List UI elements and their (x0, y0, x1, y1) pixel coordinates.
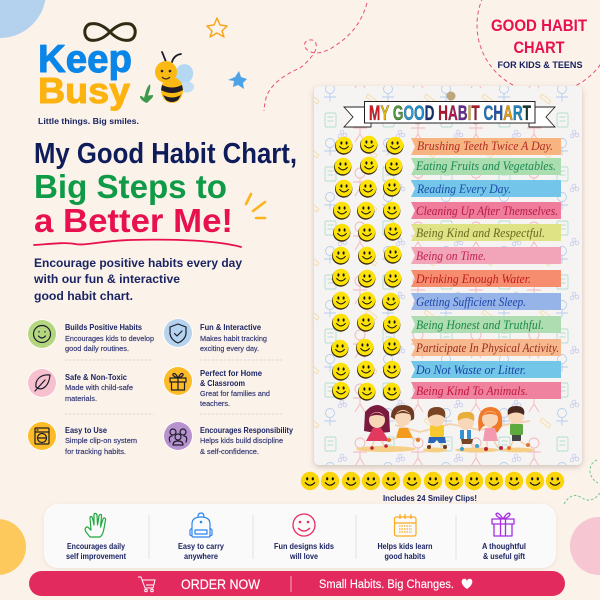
habit 6: Being on Time. (416, 249, 486, 263)
heading line 2: Big Steps to (34, 168, 227, 205)
order bar (29, 571, 565, 596)
dashed circle decoration (477, 0, 600, 93)
habit 2 (334, 157, 561, 176)
benefit: useful gift: A thoughtful (482, 542, 526, 551)
badge: good habit chart: FOR KIDS & TEENS (498, 60, 582, 70)
panel: features (27, 318, 293, 456)
feature: fun and interactive: Fun & Interactive (200, 323, 262, 332)
child 2 (387, 405, 420, 442)
pink corner circle (570, 517, 600, 575)
icon: bee (155, 52, 196, 103)
feature: easy to use: for tracking habits. (65, 447, 126, 456)
feature: fun and interactive: exciting every day. (200, 344, 259, 353)
child 6 (507, 406, 530, 450)
child 1 (364, 405, 390, 450)
habit 1: Brushing Teeth Twice A Day. (417, 139, 553, 153)
description text: good habit chart. (34, 289, 133, 303)
benefit: easy to carry: anywhere (184, 552, 219, 561)
benefit: fun designs: will love (289, 552, 319, 561)
habit 5: Being Kind and Respectful. (416, 226, 545, 240)
feature: builds positive habits (27, 319, 154, 353)
child 3 (427, 407, 447, 449)
habit 2: Eating Fruits and Vegetables. (415, 159, 556, 173)
habit 6 (332, 246, 561, 265)
panel: habit chart board (314, 86, 582, 465)
habit 11 (332, 361, 561, 381)
badge: good habit chart: CHART (514, 39, 564, 57)
benefit: self improvement: self improvement (66, 552, 126, 561)
logo word Keep: Keep (38, 38, 132, 81)
benefit: easy to carry (178, 513, 225, 561)
feature: safe and non-toxic: Made with child-safe (65, 383, 133, 392)
heading line 3: a Better Me! (34, 202, 233, 239)
feature: builds positive habits: Encourages kids to develop (65, 334, 154, 343)
feature: builds positive habits: Builds Positive Habits (65, 323, 142, 332)
feature: easy to use (27, 421, 137, 456)
description text: with our fun & interactive (33, 272, 180, 286)
order now label: ORDER NOW (181, 577, 260, 592)
benefit: easy to carry: Easy to carry (178, 542, 225, 551)
heading (34, 138, 297, 247)
row of loose smiley clips (301, 472, 564, 490)
habit 12: Being Kind To Animals. (416, 384, 528, 398)
habit 7: Drinking Enough Water. (415, 272, 531, 286)
habit 7 (332, 269, 561, 288)
benefit: helps learn habits (378, 514, 433, 561)
feature: safe and non-toxic: materials. (65, 394, 97, 403)
habit rows (331, 136, 561, 401)
yellow corner circle (0, 519, 26, 575)
habit 10: Participate In Physical Activity. (415, 341, 559, 355)
smiley clips caption: Includes 24 Smiley Clips! (383, 494, 477, 503)
child 4 (458, 412, 479, 451)
icon: cart (138, 577, 155, 592)
feature: fun and interactive (163, 318, 267, 353)
habit 10 (331, 338, 561, 358)
benefit: helps learn habits: good habits (384, 552, 426, 561)
feature: encourages responsibility (163, 421, 293, 456)
icon: outline star (207, 18, 227, 37)
feature: builds positive habits: good daily routines. (65, 344, 129, 353)
habit 9 (332, 314, 561, 334)
habit 4 (333, 202, 561, 220)
blue corner circle (0, 0, 46, 38)
feature: perfect for home and classroom (163, 366, 270, 408)
feature: perfect for home and classroom: Perfect for Home (200, 369, 263, 378)
habit 3: Reading Every Day. (416, 182, 511, 196)
feature: safe and non-toxic: Safe & Non-Toxic (65, 373, 128, 382)
benefit: helps learn habits: Helps kids learn (378, 542, 433, 551)
habit 3 (335, 179, 561, 198)
green dashed decoration (564, 460, 600, 504)
feature: perfect for home and classroom: Great for families and (200, 389, 270, 398)
dashed swirl decoration (264, 3, 367, 111)
child 5 (478, 407, 503, 451)
logo: Keep Busy (38, 24, 196, 126)
benefit: self improvement (66, 514, 126, 561)
chart banner: MY GOOD HABIT CHART (369, 102, 531, 125)
benefit: fun designs (274, 514, 335, 561)
feature: encourages responsibility: Encourages Responsibility (200, 426, 293, 435)
feature: perfect for home and classroom: teachers. (200, 399, 230, 408)
feature: easy to use: Simple clip-on system (65, 436, 137, 445)
badge: good habit chart: GOOD HABIT (491, 17, 587, 35)
pin (446, 92, 456, 100)
feature: fun and interactive: Makes habit tracking (200, 334, 267, 343)
panel: benefits strip (44, 504, 556, 568)
benefit: useful gift (482, 513, 526, 561)
logo word Busy: Busy (38, 70, 130, 111)
habit 11: Do Not Waste or Litter. (415, 363, 526, 377)
habit 8 (332, 292, 561, 311)
illustration: children holding hands (356, 405, 534, 452)
icon: infinity (85, 24, 135, 40)
habit 8: Getting Sufficient Sleep. (416, 295, 526, 309)
benefit: useful gift: & useful gift (483, 552, 525, 561)
badge: good habit chart (491, 17, 587, 70)
habit 9: Being Honest and Truthful. (416, 318, 544, 332)
icon: heart (462, 579, 472, 589)
feature: perfect for home and classroom: & Classroom (200, 379, 245, 388)
sparks (246, 194, 265, 218)
heading line 1: My Good Habit Chart, (34, 138, 297, 170)
benefit: fun designs: Fun designs kids (274, 542, 335, 551)
feature: encourages responsibility: & self-confidence. (200, 447, 259, 456)
underline (34, 240, 241, 247)
description text (33, 256, 242, 303)
description text: Encourage positive habits every day (34, 256, 242, 270)
icon: blue star (228, 71, 247, 89)
feature: encourages responsibility: Helps kids build discipline (200, 436, 283, 445)
benefit: self improvement: Encourages daily (67, 542, 126, 551)
icon: leaf (140, 84, 153, 103)
habit 4: Cleaning Up After Themselves. (416, 204, 558, 218)
feature: safe and non-toxic (27, 368, 133, 403)
tagline: Little things. Big smiles. (38, 116, 139, 126)
slogan: Small Habits. Big Changes. (319, 579, 454, 591)
habit 1 (335, 136, 561, 155)
habit 5 (333, 223, 561, 242)
habit 12 (332, 382, 561, 401)
feature: easy to use: Easy to Use (65, 426, 108, 435)
